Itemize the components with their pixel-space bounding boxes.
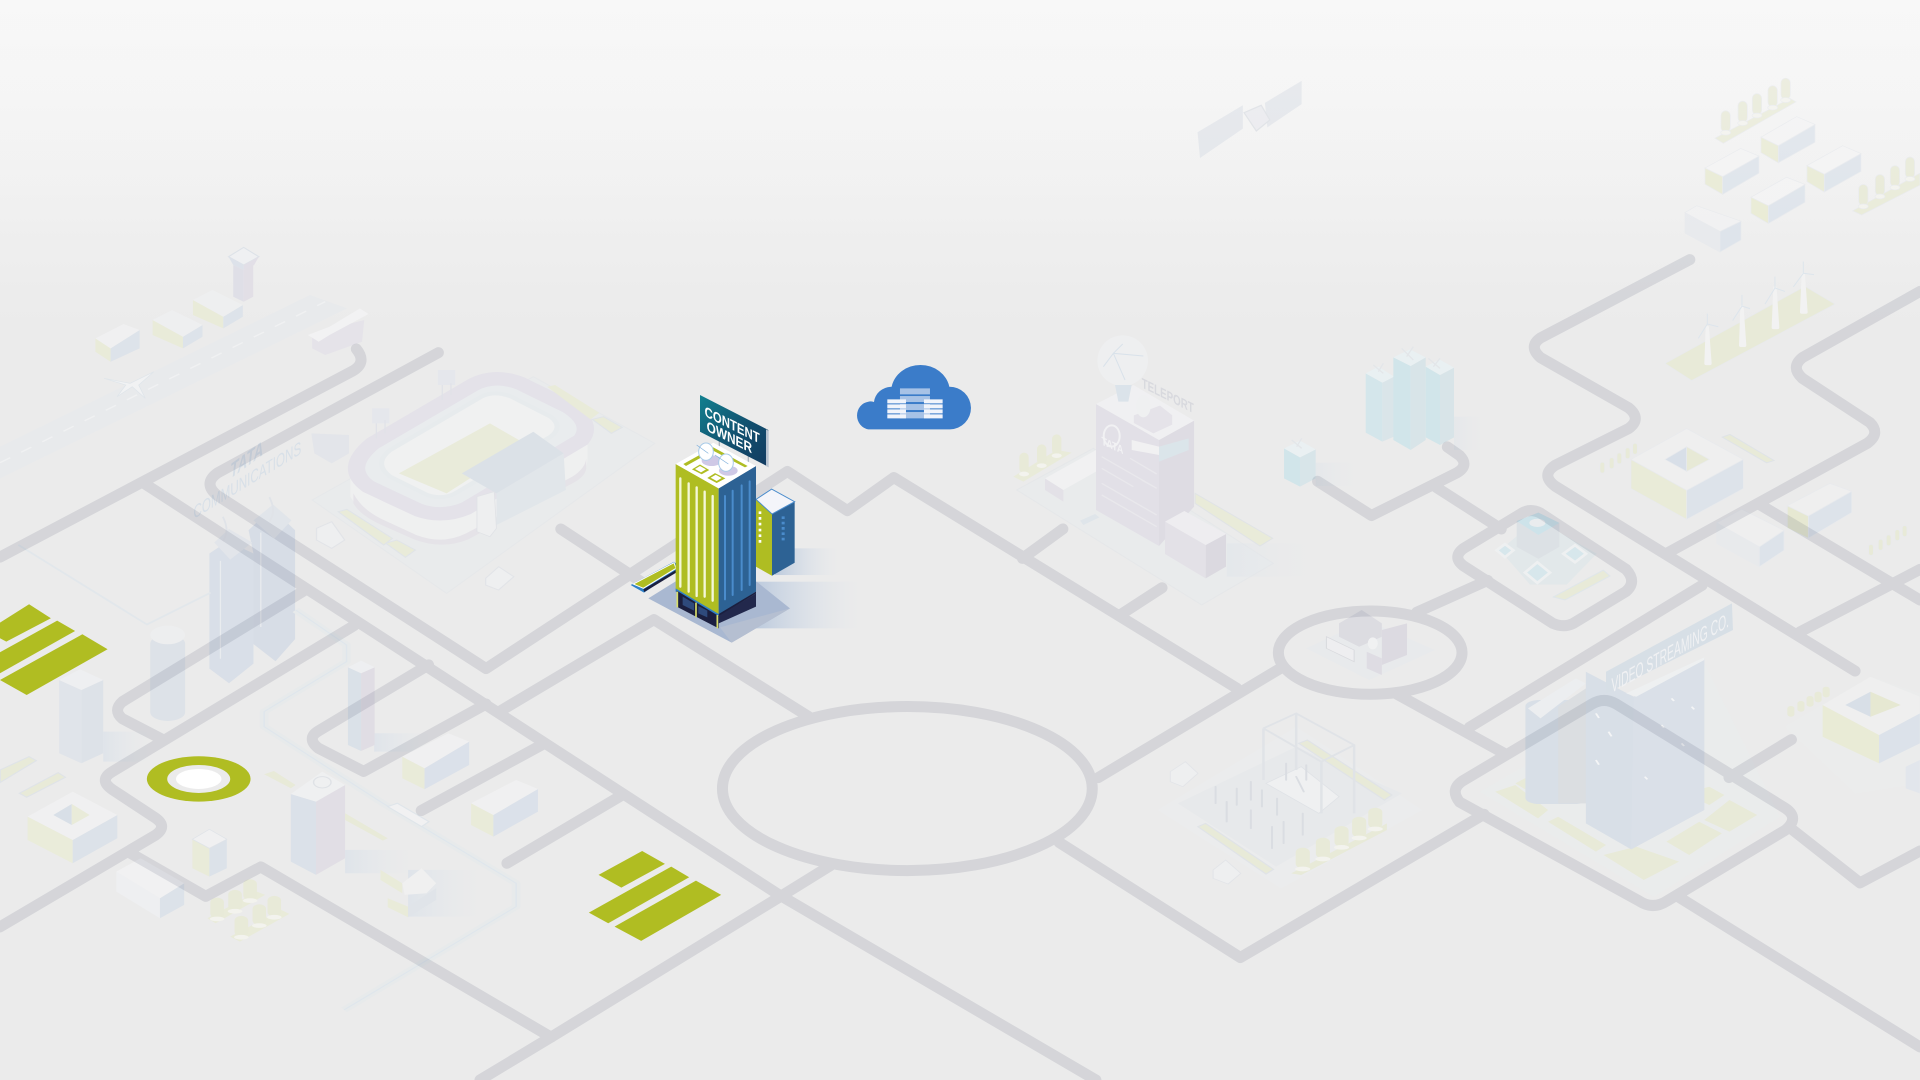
ground shadows xyxy=(648,548,860,643)
content owner sign xyxy=(700,395,769,467)
label: Tata Communications: TATA xyxy=(230,436,263,483)
lower-left district xyxy=(0,610,538,1010)
side building xyxy=(756,489,795,576)
sign poles xyxy=(719,440,748,466)
small venue inside ellipse xyxy=(1306,610,1435,680)
teleport building: TELEPORT xyxy=(1142,376,1194,417)
satellite xyxy=(1198,81,1302,158)
stadium xyxy=(311,370,655,593)
rooftop dishes xyxy=(691,443,738,483)
concert and venue district xyxy=(1158,713,1422,888)
teleport building: TATA xyxy=(1101,434,1124,457)
green fields left xyxy=(0,604,108,695)
data centre xyxy=(1497,513,1610,600)
content owner sign: OWNER xyxy=(707,418,752,457)
teal data towers xyxy=(1284,347,1484,487)
right edge building xyxy=(1785,677,1920,793)
green fields centre xyxy=(589,851,721,941)
cloud server icon xyxy=(857,365,971,429)
label: Tata Communications: COMMUNICATIONS xyxy=(193,438,301,524)
teleport building xyxy=(1013,335,1313,605)
top fade overlay xyxy=(0,0,1920,245)
video streaming campus xyxy=(1480,603,1780,897)
top-right campus xyxy=(1600,78,1920,567)
content owner building xyxy=(631,395,860,643)
road network xyxy=(0,260,1920,1080)
text: VIDEO STREAMING CO. xyxy=(1611,608,1729,698)
server stack xyxy=(887,388,943,418)
roadside pad xyxy=(631,562,677,593)
faint platform outline xyxy=(18,545,211,624)
main tower xyxy=(676,443,756,628)
label: Tata Communications xyxy=(193,436,301,524)
left towers xyxy=(209,497,295,683)
green roundabout xyxy=(147,756,251,802)
airport district xyxy=(0,247,369,478)
content owner sign: CONTENT xyxy=(705,404,760,448)
